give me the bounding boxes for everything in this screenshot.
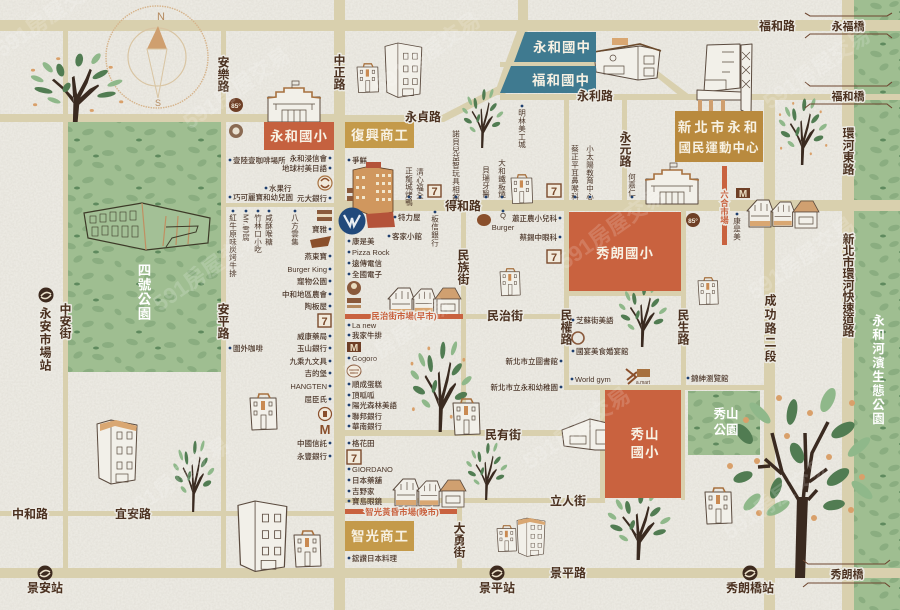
school label: 福和國中: 福和國中 <box>532 72 590 88</box>
shop labels: west block, left aligned: 水果行 <box>269 183 292 193</box>
building: top-centre apartment <box>385 43 422 97</box>
icon: 7-11 中正路 west <box>318 314 331 328</box>
watermark: 591房屋交易 <box>759 22 875 114</box>
tree: 宜安路 <box>173 440 215 512</box>
shop labels: 秀朗 neighbourhood: Burger <box>492 223 515 232</box>
shop labels: west of 中正路, right aligned: 燕東寶 <box>304 251 327 261</box>
shop labels: east of 中正路: 全國電子 <box>352 270 382 279</box>
road labels: 得和路 <box>445 198 481 213</box>
road labels: 永利路 <box>577 88 613 103</box>
road labels: 永安市場站 <box>38 306 52 372</box>
park label: 秀山公園: 秀山 <box>713 406 739 421</box>
icon: 7-11 秀朗 <box>547 250 561 264</box>
road labels: 中安街 <box>58 302 72 340</box>
school block: 秀山國小 <box>605 390 681 498</box>
market bar: 六合市場 <box>720 166 730 245</box>
road labels: 安樂路 <box>216 55 230 92</box>
compass: N <box>157 11 165 23</box>
MRT: 秀朗橋站 <box>726 566 774 595</box>
school label: 永和國小: 永和國小 <box>270 129 328 144</box>
shop labels: west of 中正路, right aligned: 永豐銀行 <box>297 451 327 461</box>
school block: 秀朗國小: 秀朗國小 <box>596 246 654 261</box>
shop labels: west of 中正路, right aligned: 屈臣氏 <box>304 394 327 404</box>
market bar: 民治街市場 <box>345 311 463 321</box>
icon: bank swirl <box>318 176 332 190</box>
icon: 85度C 秀朗: 85° <box>688 217 698 225</box>
icon: MOS Burger: M <box>320 422 330 437</box>
road labels: 民有街 <box>485 427 521 442</box>
watermark: 591房屋交易 <box>554 182 670 274</box>
tree: 環河東路 <box>778 97 828 165</box>
shop labels: west of 中正路, right aligned: 中和地區農會 <box>282 289 327 299</box>
shop labels: vertical along 得和路: 板信銀行 <box>430 214 440 247</box>
shop labels: east of 中正路: 日本藥舖 <box>352 475 382 485</box>
icon: 7-11 得和路 east: 7 <box>551 186 557 198</box>
compass: S <box>155 98 161 108</box>
shop labels: west block, left aligned: 竹林口小吃 <box>253 213 262 254</box>
shop labels: vertical along 得和路: 大和鐵板燒 <box>497 158 506 199</box>
MRT: 秀朗橋站: 秀朗橋站 <box>726 580 774 595</box>
building: 中正路 large office <box>238 501 287 571</box>
building: 秀山公園 south <box>705 488 732 524</box>
shop labels: vertical along 得和路: 康是美 <box>732 216 742 241</box>
shop labels: east of 中正路: 客家小館 <box>392 231 422 241</box>
building: 秀山國小 school <box>562 419 620 450</box>
building: 永和國小 <box>267 81 321 122</box>
watermark: 591房屋交易 <box>179 42 295 134</box>
shop labels: east of 中正路: Gogoro <box>352 354 377 363</box>
road labels: 永貞路 <box>405 109 441 124</box>
park: 秀山公園 green area <box>688 391 760 455</box>
bridge brackets <box>803 13 892 587</box>
MRT: 景安站 <box>27 566 63 595</box>
shop labels: west of 中正路, right aligned: 威康藥局 <box>297 331 327 341</box>
road labels: 宜安路 <box>115 506 151 521</box>
park: 永和河濱生態公園 green strip <box>854 0 900 610</box>
park label: 永和河濱生態公園: 永和河濱生態公園 <box>870 313 884 426</box>
building: 安平路 small <box>250 394 277 430</box>
school label: 永和國小 <box>264 122 334 150</box>
icon: McDonald's 中正路 <box>347 342 361 354</box>
building: 福和國中 <box>594 38 661 80</box>
shop labels: west of 中正路, right aligned: Burger King <box>287 265 327 274</box>
shop labels: west of 中正路, right aligned: 寵物公園 <box>297 276 327 286</box>
shop labels: east of 中正路: 華南銀行 <box>352 421 382 431</box>
road labels: 環河東路 <box>841 127 855 175</box>
tree: 立人街 <box>466 442 508 500</box>
icon: stripe sign 中正路 <box>347 298 361 308</box>
building: 大勇街 small <box>497 526 516 552</box>
icon: bakery stripe <box>317 210 332 221</box>
market bar: 民治街市場: 民治街市場(早市) <box>371 311 437 321</box>
shop labels: vertical along 得和路: 諾貝兒益智玩具相舘 <box>451 129 460 202</box>
shop labels: west block, left aligned: Mr.雪腐 <box>241 214 250 242</box>
shop labels: vertical along 得和路: 清心福全 <box>415 167 424 200</box>
road labels: 民生路 <box>676 309 690 345</box>
shop labels: east of 中正路: 聯邦銀行 <box>352 411 382 421</box>
building: 中正路 small <box>294 531 321 567</box>
school label: 智光商工 <box>345 521 414 551</box>
icon: 7-11 得和路 west <box>428 185 441 198</box>
shop labels: east of 中正路: 吉野家 <box>352 486 375 496</box>
shop labels: vertical along 得和路 <box>404 105 742 247</box>
shop labels: west of 中正路, right aligned: 玉山銀行 <box>297 343 327 353</box>
shop labels: east of 中正路: 爭鮮 <box>352 155 367 165</box>
tree: upper left <box>29 52 124 122</box>
building: 國民運動中心 <box>697 44 752 115</box>
shop labels: west of 中正路, right aligned: 吉的堡 <box>304 368 327 378</box>
road labels: 民治街 <box>487 308 523 323</box>
road labels: 福和橋 <box>832 89 864 103</box>
school label: 永和國中: 永和國中 <box>533 39 591 55</box>
shop labels: west block, left aligned: 巧可麗寶和幼兒園 <box>233 192 293 202</box>
road labels: 大勇街 <box>452 521 466 559</box>
shop labels: west of 中正路, right aligned: HANGTEN <box>290 382 327 391</box>
road labels: 安平路 <box>216 302 230 339</box>
shop labels: west of 中正路, right aligned <box>282 153 331 461</box>
shop labels: west block, left aligned: 八方雲集 <box>290 214 300 246</box>
tree: 永貞路 <box>462 88 504 148</box>
road labels: 民權路 <box>559 309 573 345</box>
icon: a.mart <box>626 369 651 386</box>
market bar: 六合市場: 六合市場 <box>720 189 730 225</box>
building: 中和路 office <box>97 420 137 484</box>
shop labels: east of 中正路: 我家牛排 <box>352 330 382 340</box>
shop labels: west block, left aligned <box>228 155 300 353</box>
shop labels: west of 中正路, right aligned: 地球村美日語 <box>282 163 327 173</box>
icon: round shop badge <box>318 408 332 420</box>
road labels: 永福橋 <box>832 19 864 33</box>
icon: Q Burger blob <box>477 214 491 226</box>
building: 四號公園 gym <box>84 203 210 250</box>
icon: 7-11 秀朗: 7 <box>551 252 557 264</box>
building: 民權路 small <box>500 269 520 296</box>
road labels: 景平路 <box>550 565 586 580</box>
shop labels: west block, left aligned: 圍外咖啡 <box>233 343 263 353</box>
icon: 7-11 中正路 west: 7 <box>321 316 328 328</box>
shop labels: 秀朗 neighbourhood: 新北市立圖書館 <box>506 356 558 366</box>
road labels: 福和路 <box>759 18 795 33</box>
shop labels: 秀朗 neighbourhood: 芝蘇街美語 <box>576 315 614 325</box>
building: small apartment 中正路 <box>357 64 379 93</box>
label: 新北市永和國民運動中心 <box>675 111 763 162</box>
icon: McDonald's 六合 <box>736 188 750 200</box>
school label: 福和國中 <box>500 66 596 93</box>
MRT: 永安市場站 icon <box>38 288 54 302</box>
shop labels: east of 中正路: 鋐讚日本料理 <box>352 553 397 563</box>
watermark: 591房屋交易 <box>149 224 265 316</box>
icon: 7-11 得和路 east <box>547 184 561 198</box>
shop labels: west of 中正路, right aligned: 寶雅 <box>312 224 327 234</box>
shop labels: vertical along 得和路: 小太陽教育中心 <box>585 145 594 200</box>
park label: 秀山公園: 公園 <box>713 423 739 437</box>
building: 民生路 small <box>698 278 718 305</box>
icon: flag sign <box>310 236 331 248</box>
label: 新北市永和國民運動中心: 新北市永和 <box>678 119 760 135</box>
shop labels: east of 中正路: 頂呱呱 <box>352 390 375 400</box>
icon: 85度C 安樂路: 85° <box>231 102 241 110</box>
building: 得和路 small <box>511 175 533 204</box>
watermark: 591房屋交易 <box>744 212 860 304</box>
watermark: 591房屋交易 <box>519 382 635 474</box>
market bar: 智光黃昏市場: 智光黃昏市場(晚市) <box>365 507 439 517</box>
school label: 復興商工: 復興商工 <box>351 127 409 143</box>
shop labels: west of 中正路, right aligned: 九乘九文具 <box>290 356 327 366</box>
building: 民有街 small <box>453 399 480 435</box>
shop labels: west block, left aligned: 咸酥喉糖 <box>264 213 274 246</box>
compass <box>106 6 208 108</box>
shop labels: west of 中正路, right aligned: 永和浸信會 <box>290 153 327 163</box>
icon: 國宴 badge <box>572 332 584 344</box>
park label: 四號公園: 四號公園 <box>136 263 151 321</box>
market bar: 智光黃昏市場 <box>345 507 457 517</box>
shop labels: 秀朗 neighbourhood: 蔡錫中眼科 <box>520 232 557 242</box>
shop labels: vertical along 得和路: 貝瑞牙醫 <box>481 166 490 198</box>
school label: 智光商工: 智光商工 <box>351 528 409 544</box>
shop labels: 秀朗 neighbourhood: 錦紳瀏覽館 <box>691 373 729 383</box>
shop labels: east of 中正路: 寶島眼鏡 <box>352 496 382 506</box>
market stalls: 六合 <box>747 200 819 228</box>
shop labels: west of 中正路, right aligned: 陶板屋 <box>304 301 327 311</box>
shop labels: east of 中正路: 康是美 <box>352 236 375 246</box>
road labels: 新北市環河快速道路 <box>841 232 855 337</box>
market stalls: 民治街 <box>388 288 461 315</box>
shop labels: 秀朗 neighbourhood: Q <box>500 211 506 220</box>
icon: stripe sign west of tower <box>347 188 353 201</box>
road labels: 永元路 <box>618 130 632 167</box>
park: 四號公園 green area <box>68 122 221 372</box>
watermark: 591房屋交易 <box>719 452 835 544</box>
road labels: 秀朗橋 <box>830 567 864 581</box>
shop labels: vertical along 得和路: 蔡正平耳鼻喉科 <box>570 144 580 201</box>
road labels: 中和路 <box>12 506 48 521</box>
park label: 秀山公園 <box>713 406 739 437</box>
icon: 85度C 秀朗 <box>686 213 700 227</box>
shop labels: west of 中正路, right aligned: 元大銀行 <box>297 193 327 203</box>
icon: McDonald's 六合: M <box>739 189 747 200</box>
shop labels: east of 中正路 <box>348 155 422 563</box>
shop labels: 秀朗 neighbourhood: 新北市立永和幼稚園 <box>490 382 558 392</box>
shop labels: west block, left aligned: 壹陸壹咖啡場所 <box>233 155 286 165</box>
shop labels: 秀朗 neighbourhood: 蕭正農小兒科 <box>512 213 557 223</box>
icon: 7-11 中正路 east: 7 <box>351 453 357 465</box>
school label: 復興商工 <box>345 122 414 148</box>
road labels: 立人街 <box>550 493 586 508</box>
building: featured tower 復興 <box>353 162 395 228</box>
icon: KFC <box>347 281 361 295</box>
shop labels: east of 中正路: 格花田 <box>352 438 374 448</box>
watermark: 591房屋交易 <box>369 7 485 99</box>
icon: coffee shop badge <box>229 124 243 138</box>
shop labels: vertical along 得和路: 正龍城烤鴨 <box>404 167 414 207</box>
shop labels: vertical along 得和路: 何嘉仁 <box>627 172 636 197</box>
shop labels: east of 中正路: La new <box>352 321 377 330</box>
road labels: 中正路 <box>332 53 346 90</box>
shop labels: west block, left aligned: 紅牛原味炭烤牛排 <box>228 213 238 278</box>
shop labels: east of 中正路: GIORDANO <box>352 465 393 474</box>
market stalls: 智光 <box>393 479 466 507</box>
tree: 景平路 <box>607 489 672 560</box>
icon: a.mart: a.mart <box>636 380 651 386</box>
big tree: 秀朗橋 <box>727 386 875 578</box>
school label: 永和國中 <box>514 32 596 62</box>
school block: 秀山國小: 國小 <box>630 445 660 460</box>
shop labels: west of 中正路, right aligned: 中國信託 <box>297 438 327 448</box>
watermark: 591房屋交易 <box>119 432 235 524</box>
tree: 秀朗國小 south <box>618 282 668 347</box>
icon: 7-11 中正路 east <box>347 450 361 465</box>
icon: 85度C 安樂路 <box>229 98 243 112</box>
tree: 民族街 <box>410 340 473 432</box>
shop labels: vertical along 得和路: 明林美工城 <box>517 109 526 149</box>
building: 大勇街 tall <box>517 518 545 556</box>
watermark: 591房屋交易 <box>339 292 455 384</box>
icon: McDonald's 中正路: M <box>350 343 358 354</box>
road labels: 成功路二段 <box>763 293 777 364</box>
MRT: 景平站 <box>479 566 515 595</box>
shop labels: 秀朗 neighbourhood: World gym <box>575 375 611 384</box>
label: 新北市永和國民運動中心: 國民運動中心 <box>678 140 760 155</box>
shop labels: 秀朗 neighbourhood: 國宴美食婚宴館 <box>576 346 629 356</box>
shop labels: east of 中正路: 遠傳電信 <box>352 258 382 268</box>
shop labels: east of 中正路: 陽光森林美語 <box>352 400 397 410</box>
icon: cake badge <box>347 365 361 377</box>
icon: 7-11 得和路 west: 7 <box>431 186 438 198</box>
MRT: 景安站: 景安站 <box>27 580 63 595</box>
icon: blue project marker <box>338 208 366 234</box>
shop labels: east of 中正路: Pizza Rock <box>352 248 390 257</box>
school block: 秀朗國小 <box>569 212 681 291</box>
shop labels: east of 中正路: 特力屋 <box>398 212 421 222</box>
road labels: 民族街 <box>456 249 470 286</box>
shop labels: east of 中正路: 順成蛋糕 <box>352 379 382 389</box>
MRT: 景平站: 景平站 <box>479 580 515 595</box>
shop labels: 秀朗 neighbourhood <box>490 210 729 392</box>
building: 秀朗國小 school <box>645 163 699 204</box>
school block: 秀山國小: 秀山 <box>630 427 660 442</box>
